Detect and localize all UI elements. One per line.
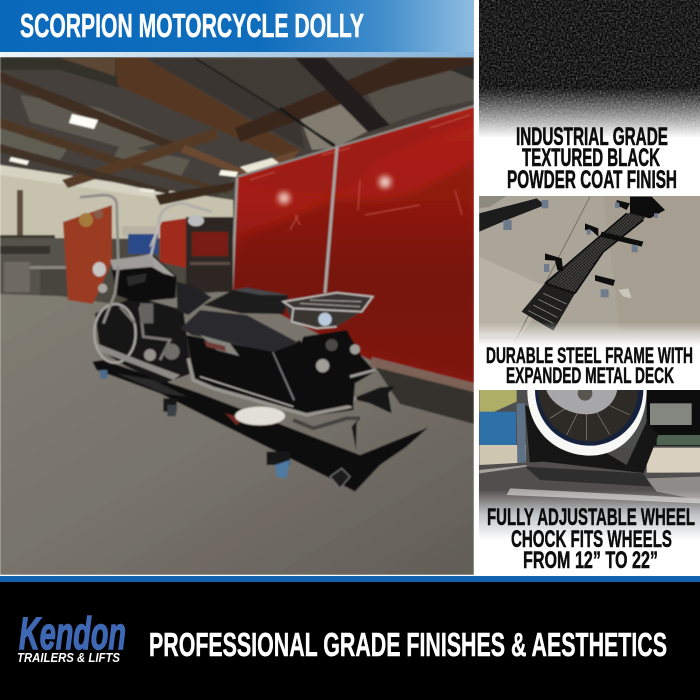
header banner — [0, 0, 474, 57]
small red curtains — [63, 205, 112, 304]
seat — [177, 282, 212, 315]
photo: motorcycle on dolly in workshop — [0, 57, 474, 575]
footer band — [0, 582, 700, 700]
ceiling tones — [0, 57, 474, 200]
logo: Kendon Trailers & Lifts: Kendon — [19, 608, 126, 659]
panel: steel frame dolly photo — [479, 196, 700, 390]
dolly — [92, 360, 428, 492]
wheel — [525, 405, 658, 473]
blue divider bar — [0, 576, 700, 582]
floor — [0, 290, 474, 575]
motorcycle traced in zoom coordinates — [80, 195, 428, 492]
caption: wheel chock — [488, 508, 695, 568]
dolly — [522, 210, 650, 331]
logo: Kendon Trailers & Lifts: TRAILERS & LIFTS — [17, 650, 120, 665]
panel: wheel chock photo — [479, 386, 700, 576]
panel: textured black finish — [479, 0, 700, 195]
title: SCORPION MOTORCYCLE DOLLY — [20, 7, 364, 44]
chrome frame and engine — [95, 297, 192, 383]
deck — [480, 462, 700, 484]
ceiling lights — [69, 114, 98, 129]
fuel tank and fairing — [112, 255, 177, 302]
exhaust — [188, 358, 355, 415]
rear: lights and fender — [300, 330, 375, 407]
saddlebag — [187, 335, 353, 417]
logo: Kendon Trailers & Lifts — [17, 608, 126, 665]
ceiling beams — [115, 58, 300, 162]
caption: finish — [507, 123, 677, 194]
left shop racks — [0, 238, 66, 296]
luggage rack — [283, 293, 373, 328]
caption: steel frame — [486, 347, 692, 384]
other dolly corner — [479, 198, 545, 232]
wall — [0, 164, 234, 240]
handlebars — [150, 203, 212, 260]
large red curtains — [232, 107, 474, 388]
